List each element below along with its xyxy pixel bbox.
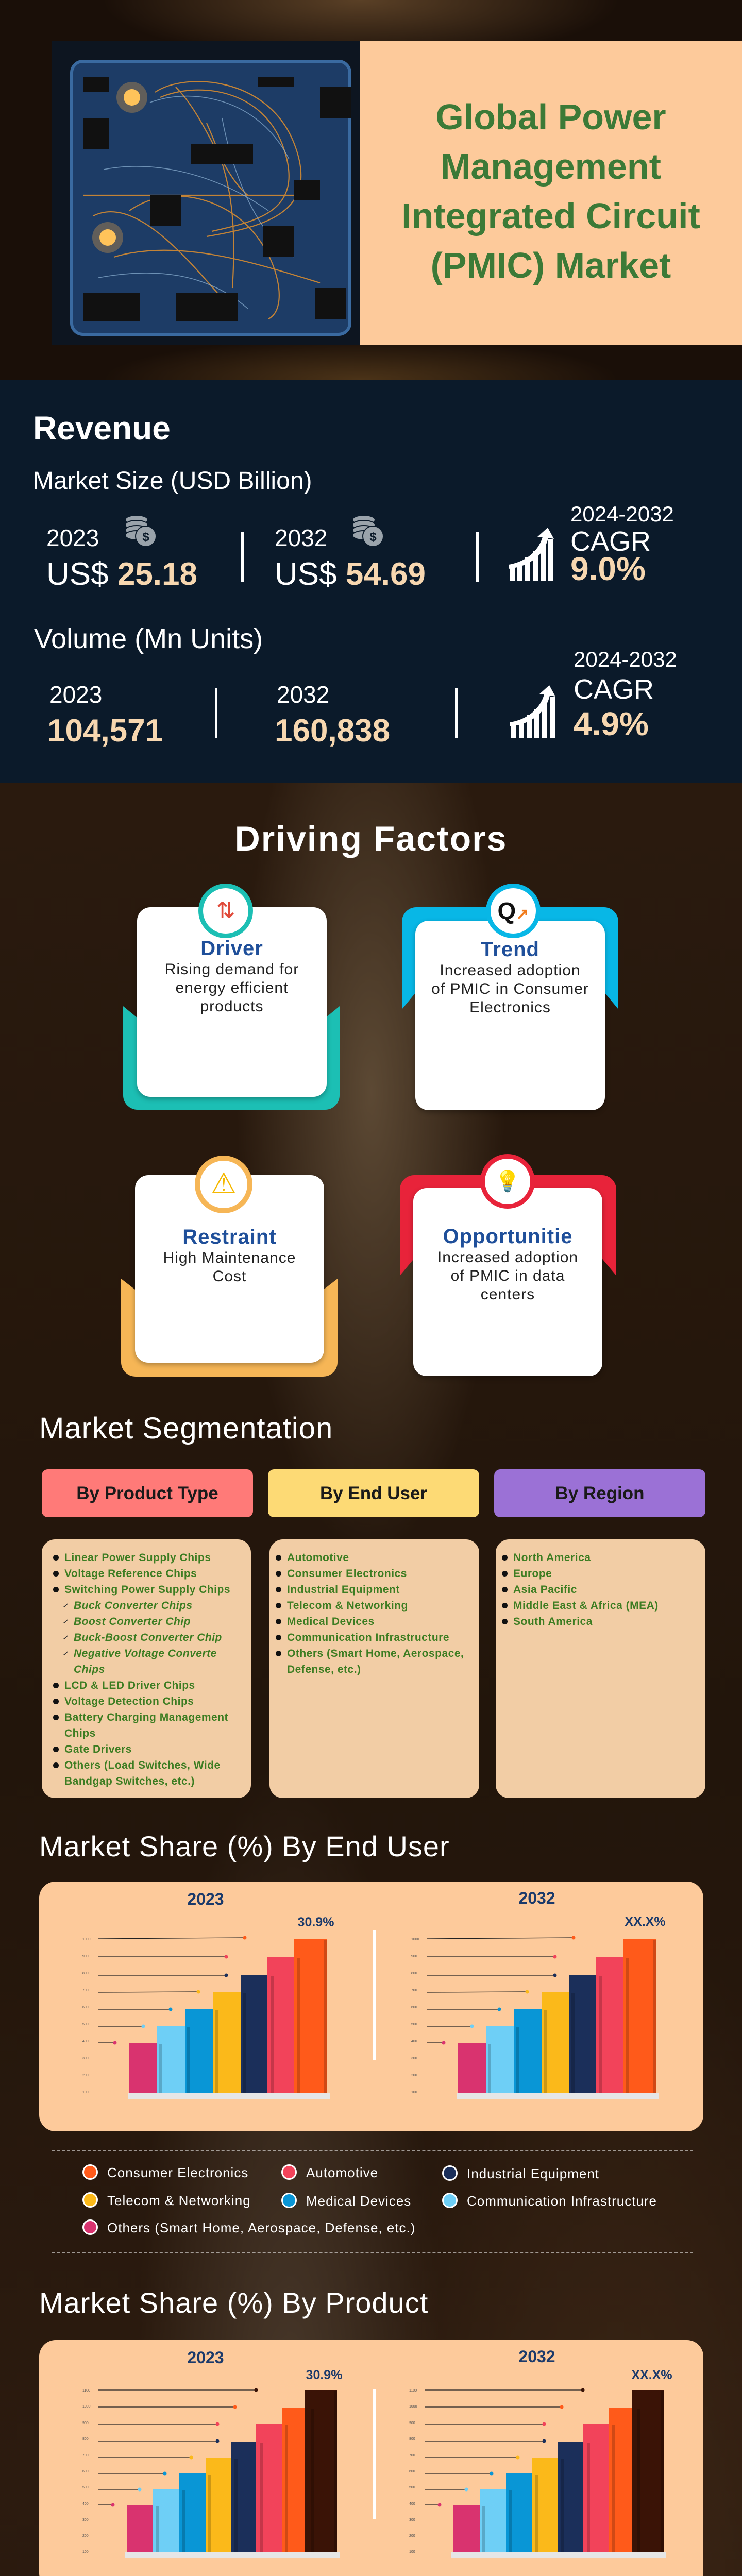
header title panel: Management [441, 146, 661, 187]
card: driver [123, 884, 340, 1110]
2023 volume: 104,571 [47, 713, 163, 749]
cagr revenue [509, 502, 674, 587]
icon: coins: $ [142, 530, 149, 544]
chart: end user [82, 1889, 666, 2099]
header title panel: (PMIC) Market [431, 245, 671, 285]
legend: end user [82, 2164, 657, 2235]
driving factors title: Driving Factors [235, 819, 507, 858]
revenue heading: Revenue [33, 410, 171, 447]
list: region: South America [513, 1616, 593, 1628]
list: product type: Boost Converter Chip [74, 1616, 191, 1628]
list: end user: Medical Devices [287, 1616, 375, 1628]
cagr volume: 2024-2032 [574, 647, 677, 671]
header title panel: Integrated Circuit [401, 196, 700, 236]
card: trend: of PMIC in Consumer [431, 980, 589, 997]
list: region [496, 1539, 705, 1798]
header title panel: Global Power [435, 97, 666, 137]
card: opportunity: centers [481, 1286, 535, 1303]
list: product type: Switching Power Supply Chips [64, 1584, 230, 1596]
chart: end user: 2023 [187, 1890, 224, 1908]
header image: circuit board [52, 41, 360, 345]
list: product type: Others (Load Switches, Wide [64, 1759, 221, 1771]
chart: product: 800 [82, 2437, 89, 2441]
background: header [0, 0, 742, 380]
chart: end user: 200 [82, 2074, 89, 2077]
card: trend [402, 884, 618, 1113]
market segmentation heading: Market Segmentation [39, 1412, 333, 1445]
cagr revenue: 9.0% [570, 550, 646, 587]
list: end user: Industrial Equipment [287, 1584, 400, 1596]
list: end user: Defense, etc.) [287, 1664, 361, 1675]
chart: product: 300 [82, 2518, 89, 2522]
header: by product type [42, 1469, 253, 1517]
card: restraint: Cost [213, 1268, 246, 1285]
card: restraint: High Maintenance [163, 1249, 296, 1266]
header: by end user [268, 1469, 479, 1517]
list: product type: Buck Converter Chips [74, 1600, 193, 1612]
card: driver: Rising demand for [165, 961, 299, 978]
legend: end user: Medical Devices [306, 2193, 411, 2209]
card: restraint [121, 1156, 338, 1377]
icon: warning [195, 1156, 252, 1213]
icon: driver: ⇅ [216, 898, 235, 923]
volume label: Volume (Mn Units) [34, 623, 263, 654]
card: driver: energy efficient [176, 979, 288, 996]
icon: coins [126, 516, 156, 546]
header: by product type: By Product Type [76, 1483, 218, 1503]
chart: product: 900 [82, 2421, 89, 2425]
icon: coins [353, 516, 383, 546]
chart: product: 100 [82, 2550, 89, 2554]
2032 volume: 160,838 [275, 713, 390, 749]
chart: product: 200 [82, 2534, 89, 2538]
header: by region: By Region [555, 1483, 645, 1503]
header: by end user: By End User [320, 1483, 427, 1503]
chart: product: 2023 [187, 2348, 224, 2367]
list: product type: LCD & LED Driver Chips [64, 1680, 195, 1691]
cagr revenue: CAGR [570, 526, 651, 557]
icon: opportunity [480, 1154, 535, 1209]
market size label: Market Size (USD Billion) [33, 467, 312, 495]
cagr volume: 4.9% [574, 705, 649, 742]
chart: product: 1000 [82, 2405, 91, 2409]
card: opportunity: Increased adoption [437, 1249, 578, 1266]
card: restraint: Restraint [182, 1226, 277, 1248]
chart: product: 1100 [82, 2389, 90, 2393]
icon: warning: ⚠ [211, 1167, 237, 1199]
card: opportunity: Opportunitie [443, 1225, 572, 1248]
legend: end user: Consumer Electronics [107, 2165, 248, 2180]
chart: end user: XX.X% [625, 1914, 666, 1929]
chart: end user: 300 [82, 2057, 89, 2060]
list: end user: Communication Infrastructure [287, 1632, 449, 1643]
list: end user: Automotive [287, 1552, 349, 1564]
cagr volume [510, 647, 677, 742]
list: product type: Buck-Boost Converter Chip [74, 1632, 222, 1643]
list: region: Europe [513, 1568, 552, 1580]
chart: end user: 600 [82, 2006, 89, 2009]
card: driver: Driver [200, 937, 263, 960]
chart: end user: 900 [82, 1955, 89, 1958]
chart: product: 500 [82, 2486, 89, 2489]
list: product type: Gate Drivers [64, 1743, 132, 1755]
2032 market size: 2032 [275, 524, 327, 551]
list: region: Middle East & Africa (MEA) [513, 1600, 659, 1612]
legend: end user: Telecom & Networking [107, 2193, 251, 2208]
revenue section [0, 380, 742, 783]
2032 volume [275, 681, 390, 749]
chart: product: XX.X% [631, 2368, 672, 2382]
legend: end user: Industrial Equipment [467, 2166, 599, 2181]
list: product type: Voltage Detection Chips [64, 1696, 194, 1707]
list: product type [42, 1539, 251, 1798]
list: end user: Telecom & Networking [287, 1600, 408, 1612]
2023 market size: 2023 [46, 524, 99, 551]
card: opportunity [400, 1154, 616, 1378]
header title panel [360, 41, 742, 345]
chart: product [82, 2347, 672, 2558]
list: end user: Others (Smart Home, Aerospace, [287, 1648, 464, 1659]
2032 market size: US$ 54.69 [275, 556, 426, 592]
cagr volume: CAGR [574, 674, 654, 705]
icon: driver [198, 884, 253, 938]
chart: end user: 1000 [82, 1938, 91, 1941]
list: product type: Chips [74, 1664, 105, 1675]
card: trend: Electronics [469, 999, 551, 1016]
chart: product: 2032 [518, 2347, 555, 2366]
legend: end user: Communication Infrastructure [467, 2193, 657, 2209]
list: product type: Negative Voltage Converte [74, 1648, 217, 1659]
legend: end user: Automotive [306, 2165, 378, 2180]
icon: growth chart [509, 528, 554, 581]
chart: end user: 2032 [518, 1889, 555, 1907]
2023 volume [47, 681, 163, 749]
panel: end user charts [39, 1882, 703, 2131]
list: product type: Bandgap Switches, etc.) [64, 1775, 195, 1787]
card: trend: Increased adoption [440, 962, 581, 979]
list: end user [269, 1539, 479, 1798]
chart: product: 700 [82, 2454, 89, 2458]
list: product type: Chips [64, 1727, 96, 1739]
heading: market share by end user: Market Share (%) By End User [39, 1830, 450, 1862]
list: product type: Battery Charging Management [64, 1711, 228, 1723]
list: region: North America [513, 1552, 591, 1564]
chart: end user: 30.9% [298, 1915, 334, 1929]
2023 volume: 2023 [49, 681, 102, 708]
card: trend: Trend [481, 938, 539, 961]
chart: product: 600 [82, 2470, 89, 2473]
chart: end user: 100 [82, 2091, 89, 2094]
icon: trend [486, 884, 541, 938]
chart: end user: 500 [82, 2023, 89, 2026]
chart: product: 30.9% [306, 2368, 342, 2382]
icon: opportunity: 💡 [495, 1170, 520, 1193]
header: by region [494, 1469, 705, 1517]
heading: market share by product: Market Share (%) By Product [39, 2286, 428, 2319]
2032 market size [275, 516, 426, 592]
panel: product charts [39, 2340, 703, 2576]
chart: end user: 400 [82, 2040, 89, 2043]
list: product type: Linear Power Supply Chips [64, 1552, 211, 1564]
list: end user: Consumer Electronics [287, 1568, 407, 1580]
chart: product: 400 [82, 2502, 89, 2506]
cagr revenue: 2024-2032 [570, 502, 674, 526]
background: main brown [0, 783, 742, 2576]
2023 market size [46, 516, 197, 592]
list: product type: Voltage Reference Chips [64, 1568, 197, 1580]
chart: end user: 800 [82, 1972, 89, 1975]
legend: end user: Others (Smart Home, Aerospace, Defense, etc.) [107, 2220, 415, 2235]
icon: coins: $ [369, 530, 377, 544]
icon: trend: Q↗ [498, 897, 529, 924]
list: region: Asia Pacific [513, 1584, 577, 1596]
card: opportunity: of PMIC in data [451, 1267, 565, 1284]
2023 market size: US$ 25.18 [46, 556, 197, 592]
2032 volume: 2032 [277, 681, 329, 708]
chart: end user: 700 [82, 1989, 89, 1992]
icon: growth chart [510, 685, 555, 738]
card: driver: products [200, 998, 264, 1015]
